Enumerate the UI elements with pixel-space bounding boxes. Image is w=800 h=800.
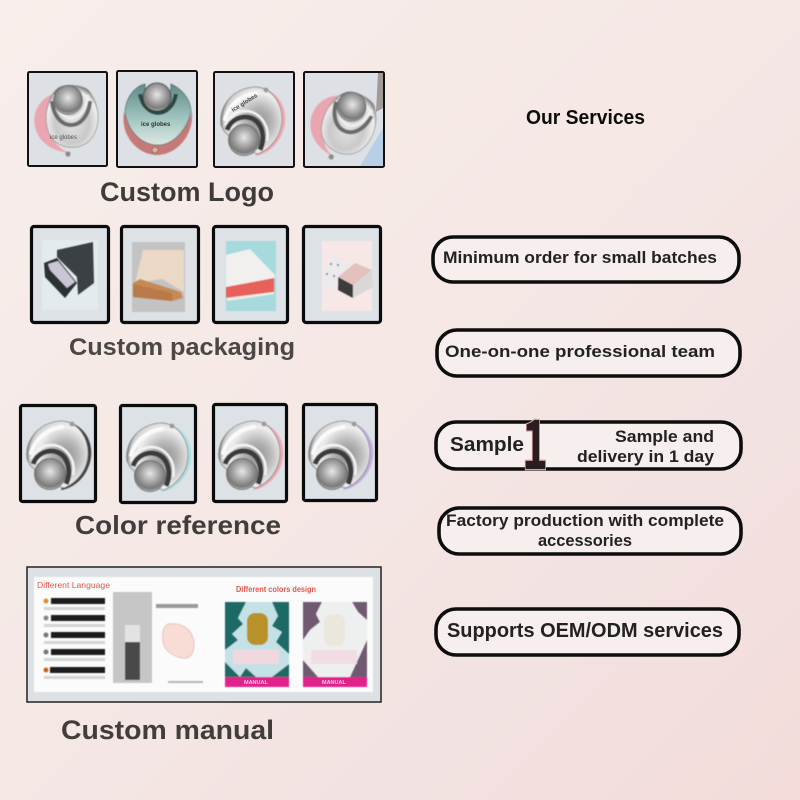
manual sheet background <box>27 567 381 702</box>
manual face illustration <box>156 604 203 683</box>
manual white page <box>34 577 373 692</box>
color option: black <box>20 406 96 502</box>
manual heading: different language: Different Language <box>37 581 111 590</box>
manual poster 1: MANUAL <box>244 680 268 686</box>
panel: custom logo <box>28 71 385 207</box>
service pill: sample delivery: delivery in 1 day <box>577 447 715 466</box>
packaging photo 3: white and red drawer box <box>214 226 288 322</box>
service pill: sample delivery: Sample <box>450 434 524 456</box>
logo photo 2: teal device with rose base <box>117 71 197 167</box>
color option: lilac <box>304 404 376 500</box>
heading: custom packaging: Custom packaging <box>69 334 295 361</box>
logo photo 1: silver device with pink band: ice globes <box>50 135 77 141</box>
manual poster 2 <box>303 602 367 687</box>
color option: pink <box>214 404 286 502</box>
service pill: minimum order <box>433 237 739 282</box>
service pill: factory production: accessories <box>538 531 632 550</box>
manual heading: different colors design: Different colors design <box>236 585 316 594</box>
panel: color reference <box>20 404 376 540</box>
logo photo 2: teal device with rose base: ice globes <box>141 122 171 128</box>
logo photo 3: silver device rotated with pink band: ice globes <box>231 93 260 114</box>
heading: color reference: Color reference <box>75 510 281 540</box>
manual language list <box>44 598 105 679</box>
packaging photo 1: dark box <box>32 226 108 322</box>
manual device illustration <box>113 592 152 683</box>
packaging photo 4: small patterned box <box>304 226 380 322</box>
color option: light blue <box>120 406 196 502</box>
panel: custom packaging <box>32 226 380 361</box>
service pill: sample delivery: 1 <box>522 390 548 489</box>
manual poster 1 <box>225 602 289 687</box>
service pill: minimum order: Minimum order for small batches <box>443 248 717 267</box>
logo photo 3: silver device rotated with pink band <box>214 72 294 167</box>
service pill: factory production: Factory production with complete <box>446 511 724 530</box>
packaging photo 2: kraft box <box>122 226 198 322</box>
service pill: factory production <box>439 508 741 554</box>
service pill: professional team <box>437 330 740 376</box>
logo photo 1: silver device with pink band <box>28 72 107 166</box>
manual poster 2: MANUAL <box>322 680 346 686</box>
service pill: sample delivery: Sample and <box>615 427 714 446</box>
service pill: OEM/ODM <box>436 609 739 655</box>
heading: custom logo: Custom Logo <box>100 177 274 207</box>
logo photo 4: tilted silver device <box>299 72 385 171</box>
service pill: OEM/ODM: Supports OEM/ODM services <box>447 620 723 642</box>
service pill: professional team: One-on-one professional team <box>445 342 715 361</box>
panel: custom manual <box>27 567 381 745</box>
service pill: sample delivery <box>436 390 741 489</box>
panel: our services <box>433 107 741 655</box>
heading: custom manual: Custom manual <box>61 715 274 745</box>
heading: our services: Our Services <box>526 107 645 129</box>
